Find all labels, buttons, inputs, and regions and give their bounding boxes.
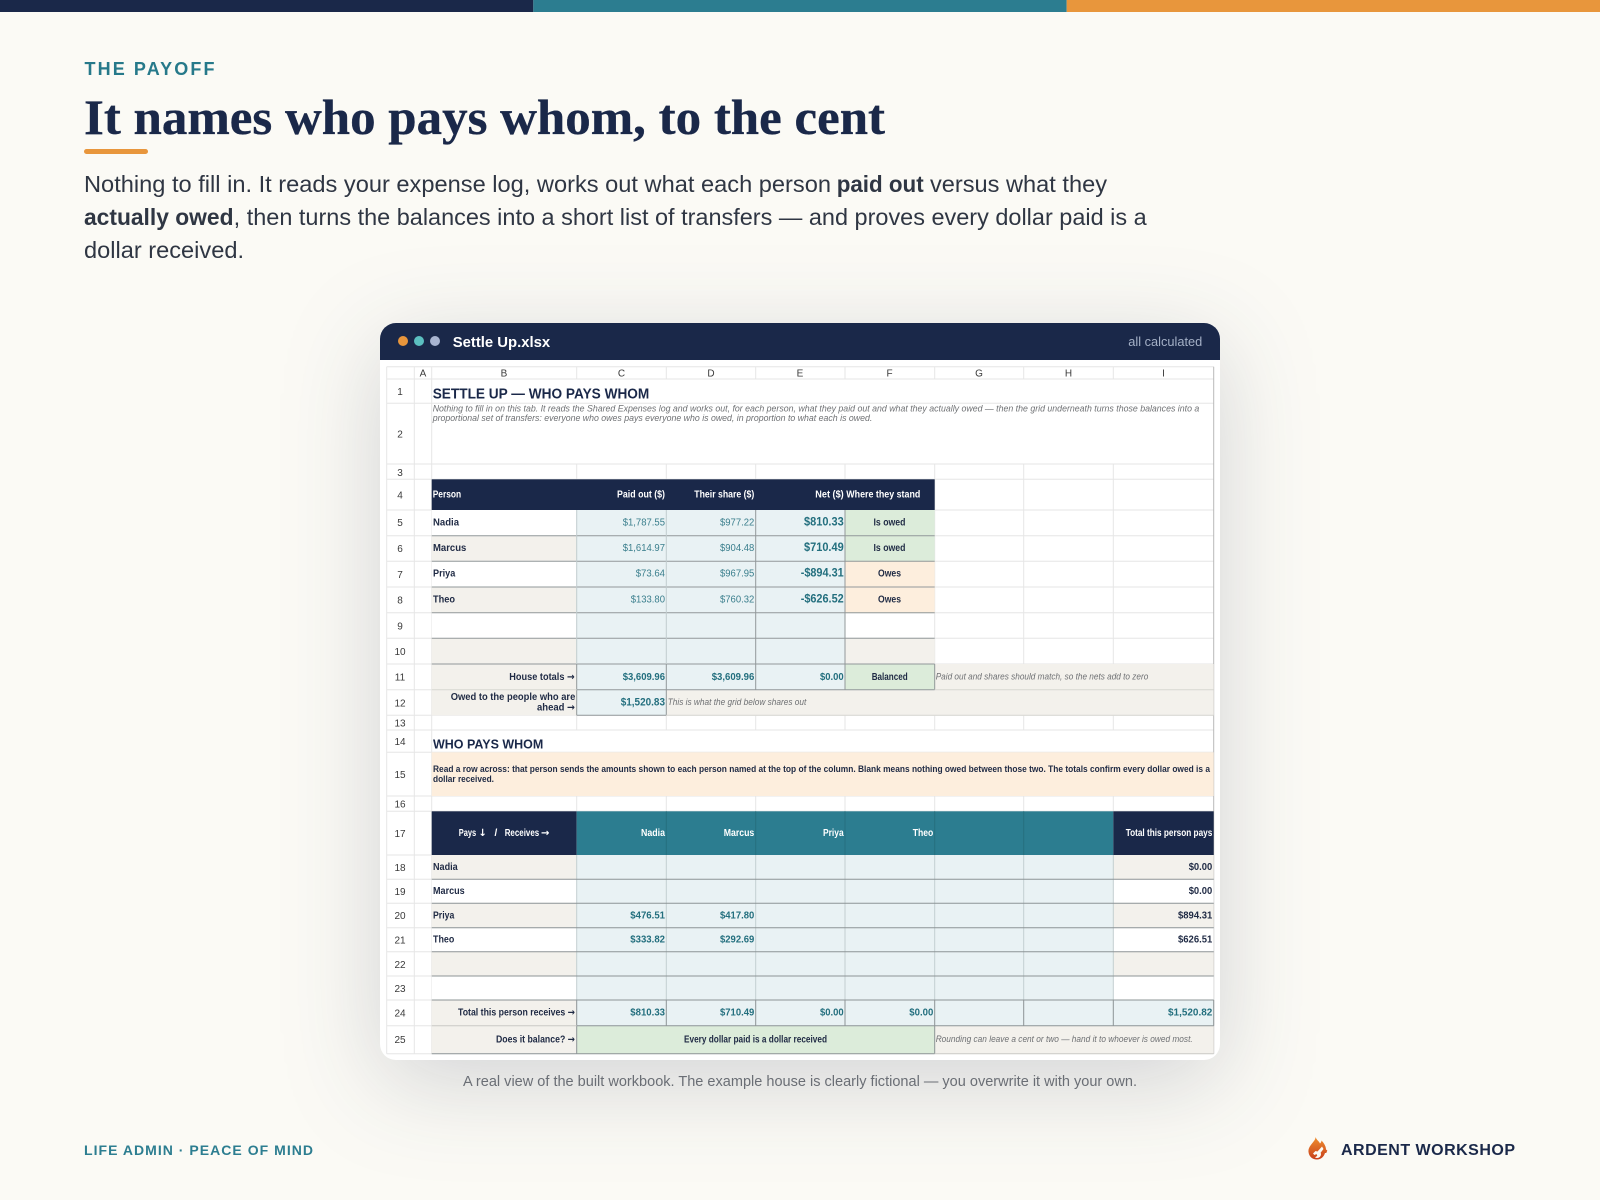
transfer matrix header: Marcus (724, 828, 755, 839)
transfer amounts: $476.51 (630, 910, 665, 921)
intro paragraph: Nothing to fill in. It reads your expense log, works out what each person (84, 171, 831, 197)
sheet heading and description: SETTLE UP — WHO PAYS WHOM (433, 386, 649, 402)
row numbers: 4 (397, 490, 403, 502)
row numbers: 15 (394, 770, 406, 781)
row numbers: 16 (394, 800, 406, 810)
owed row: This is what the grid below shares out (668, 697, 807, 707)
column letters: H (1065, 368, 1072, 380)
sheet heading and description: Nothing to fill in on this tab. It reads the Shared Expenses log and works out, for each person, what they paid out and what they actually owed — then the grid underneath turns those balances into a (433, 404, 1199, 414)
row numbers (394, 387, 406, 1046)
transfer matrix body fills (432, 855, 1214, 1054)
row numbers: 10 (394, 647, 406, 658)
net column: $710.49 (804, 542, 844, 554)
balances table (432, 479, 1214, 715)
card body with shadow (380, 323, 1220, 1060)
total paid column: $0.00 (1189, 886, 1213, 897)
intro paragraph: dollar received. (84, 237, 244, 263)
house totals row (509, 672, 1148, 683)
their share column: $967.95 (720, 569, 755, 580)
total received row: $1,520.82 (1168, 1008, 1213, 1019)
row numbers: 19 (394, 887, 406, 898)
row numbers: 20 (394, 911, 406, 922)
column letters: C (618, 368, 625, 380)
transfer matrix header: Pays (459, 828, 477, 839)
net column: $810.33 (804, 516, 844, 528)
spreadsheet window card (380, 323, 1220, 1060)
row numbers: 12 (394, 698, 406, 710)
row numbers: 5 (397, 518, 403, 529)
transfer amounts (630, 910, 755, 946)
row numbers: 2 (397, 430, 403, 440)
house totals row: $0.00 (820, 672, 844, 683)
instruction band: dollar received. (433, 774, 494, 784)
eyebrow: the payoff: THE PAYOFF (84, 59, 214, 79)
person names (433, 517, 467, 605)
total paid column: $0.00 (1189, 862, 1213, 873)
balances header row: Paid out ($) (617, 490, 665, 500)
paid out column (623, 517, 665, 605)
where they stand column (874, 517, 906, 605)
intro paragraph: versus what they (930, 171, 1107, 197)
payer names (433, 862, 465, 946)
row numbers: 14 (394, 737, 406, 748)
owed row (451, 692, 807, 713)
column letters: E (797, 368, 804, 380)
transfer matrix header: Total this person pays (1126, 828, 1213, 839)
footer tagline: LIFE ADMIN · PEACE OF MIND (84, 1142, 313, 1158)
house totals row: $3,609.96 (712, 672, 755, 683)
house totals row: $3,609.96 (623, 672, 665, 683)
row numbers: 22 (394, 960, 406, 971)
where they stand column: Is owed (874, 543, 906, 554)
window title bar: Settle Up.xlsx (453, 334, 551, 351)
row numbers: 23 (394, 984, 406, 995)
instruction band (432, 752, 1214, 796)
column letters: G (975, 368, 983, 380)
paid out column: $1,614.97 (623, 543, 665, 554)
their share column: $977.22 (720, 517, 755, 528)
person names: Theo (433, 594, 455, 605)
row numbers: 1 (397, 387, 403, 398)
total paid column: $894.31 (1178, 910, 1213, 921)
balances header row: Person (433, 490, 461, 500)
column letters: I (1162, 368, 1165, 380)
paid out column: $73.64 (636, 569, 665, 580)
person names: Priya (433, 569, 456, 580)
row numbers: 24 (394, 1008, 406, 1020)
where they stand column: Owes (878, 569, 901, 580)
where they stand column: Is owed (874, 517, 906, 528)
where they stand column: Owes (878, 594, 901, 605)
column letters: F (886, 368, 893, 380)
payer names: Priya (433, 910, 455, 921)
balance check row: Rounding can leave a cent or two — hand it to whoever is owed most. (936, 1034, 1193, 1044)
row numbers: 8 (397, 596, 403, 606)
net column: -$626.52 (801, 593, 844, 605)
balances borders (432, 510, 1214, 715)
row numbers: 21 (394, 936, 406, 946)
transfer matrix header: ↓ (478, 828, 487, 839)
row numbers: 11 (395, 672, 406, 684)
their share column (720, 517, 755, 605)
sheet heading and description: proportional set of transfers: everyone who owes pays everyone who is owed, in proportion to what each is owed. (432, 413, 872, 423)
top accent bar (0, 0, 1600, 12)
their share column: $760.32 (720, 594, 755, 605)
row numbers: 13 (394, 718, 406, 730)
row numbers: 9 (397, 622, 403, 632)
brand name: ARDENT WORKSHOP (1341, 1142, 1515, 1159)
row numbers: 18 (394, 863, 406, 874)
owed row: Owed to the people who are (451, 692, 576, 703)
instruction band: Read a row across: that person sends the amounts shown to each person named at the top of the column. Blank means nothing owed between those two. The totals confirm every dollar owed is a (433, 764, 1211, 774)
total received row: Total this person receives → (458, 1008, 575, 1019)
payer names: Nadia (433, 862, 458, 873)
window title bar (380, 323, 1220, 360)
payer names: Theo (433, 935, 454, 946)
total received row: $810.33 (630, 1008, 665, 1019)
row numbers: 17 (394, 829, 406, 840)
balances header row (432, 479, 935, 510)
row numbers: 25 (394, 1035, 406, 1046)
total received row: $710.49 (720, 1008, 755, 1019)
total received row: $0.00 (909, 1008, 934, 1019)
row numbers: 7 (397, 570, 403, 581)
row numbers: 6 (397, 544, 403, 555)
sheet heading and description (432, 386, 1199, 423)
intro paragraph: , then turns the balances into a short list of transfers — and proves every dollar paid is a (234, 204, 1147, 230)
column letters (420, 368, 1165, 380)
transfer matrix header (432, 811, 1214, 855)
spreadsheet screenshot (387, 367, 1214, 1054)
balance check row: Does it balance? → (496, 1034, 575, 1045)
total received row (458, 1008, 1213, 1019)
their share column: $904.48 (720, 543, 755, 554)
transfer matrix header: Priya (823, 828, 844, 839)
transfer matrix header: → (541, 828, 549, 839)
transfer matrix borders (432, 855, 1214, 1054)
balances header row: Their share ($) (694, 490, 754, 500)
house totals row: Paid out and shares should match, so the nets add to zero (936, 672, 1148, 682)
paid out column: $133.80 (631, 594, 665, 605)
title underline (84, 149, 148, 154)
balances fills (432, 510, 1214, 715)
payer names: Marcus (433, 886, 465, 897)
column letters: A (420, 368, 427, 380)
transfer matrix header: Theo (913, 828, 933, 839)
owed row: ahead → (537, 702, 575, 713)
net column: -$894.31 (801, 568, 844, 580)
balances header row: Where they stand (846, 490, 920, 500)
person names: Nadia (433, 517, 459, 528)
owed row: $1,520.83 (621, 697, 665, 709)
column letters: B (501, 368, 508, 380)
intro paragraph: actually owed (84, 204, 234, 230)
sheet base grid (387, 367, 1214, 1054)
transfer amounts: $292.69 (720, 935, 755, 946)
balance check row (496, 1034, 1193, 1045)
house totals row: House totals → (509, 672, 575, 683)
transfer matrix header: / (494, 828, 498, 839)
transfer matrix header: Nadia (641, 828, 665, 839)
person names: Marcus (433, 543, 467, 554)
transfer matrix header: Receives (505, 828, 540, 839)
balances header row: Net ($) (815, 490, 844, 500)
section heading: WHO PAYS WHOM (433, 736, 543, 751)
transfer amounts: $333.82 (630, 935, 665, 946)
paid out column: $1,787.55 (623, 517, 665, 528)
total paid column (1178, 862, 1213, 946)
balance check row: Every dollar paid is a dollar received (684, 1034, 827, 1045)
total paid column: $626.51 (1178, 935, 1213, 946)
row numbers: 3 (397, 468, 403, 479)
icon: flame with wrench (1308, 1137, 1327, 1160)
who pays whom section (432, 736, 1214, 1054)
intro paragraph: paid out (837, 171, 924, 197)
house totals row: Balanced (872, 672, 908, 683)
intro paragraph (84, 171, 1147, 263)
title: It names who pays whom, to the cent (84, 89, 885, 145)
footer brand (1308, 1137, 1515, 1160)
caption: A real view of the built workbook. The example house is clearly fictional — you overwrite it with your own. (463, 1074, 1137, 1090)
net column (801, 516, 844, 605)
transfer amounts: $417.80 (720, 910, 755, 921)
column letters: D (707, 368, 715, 380)
total received row: $0.00 (820, 1008, 844, 1019)
window title bar: all calculated (1128, 334, 1202, 349)
